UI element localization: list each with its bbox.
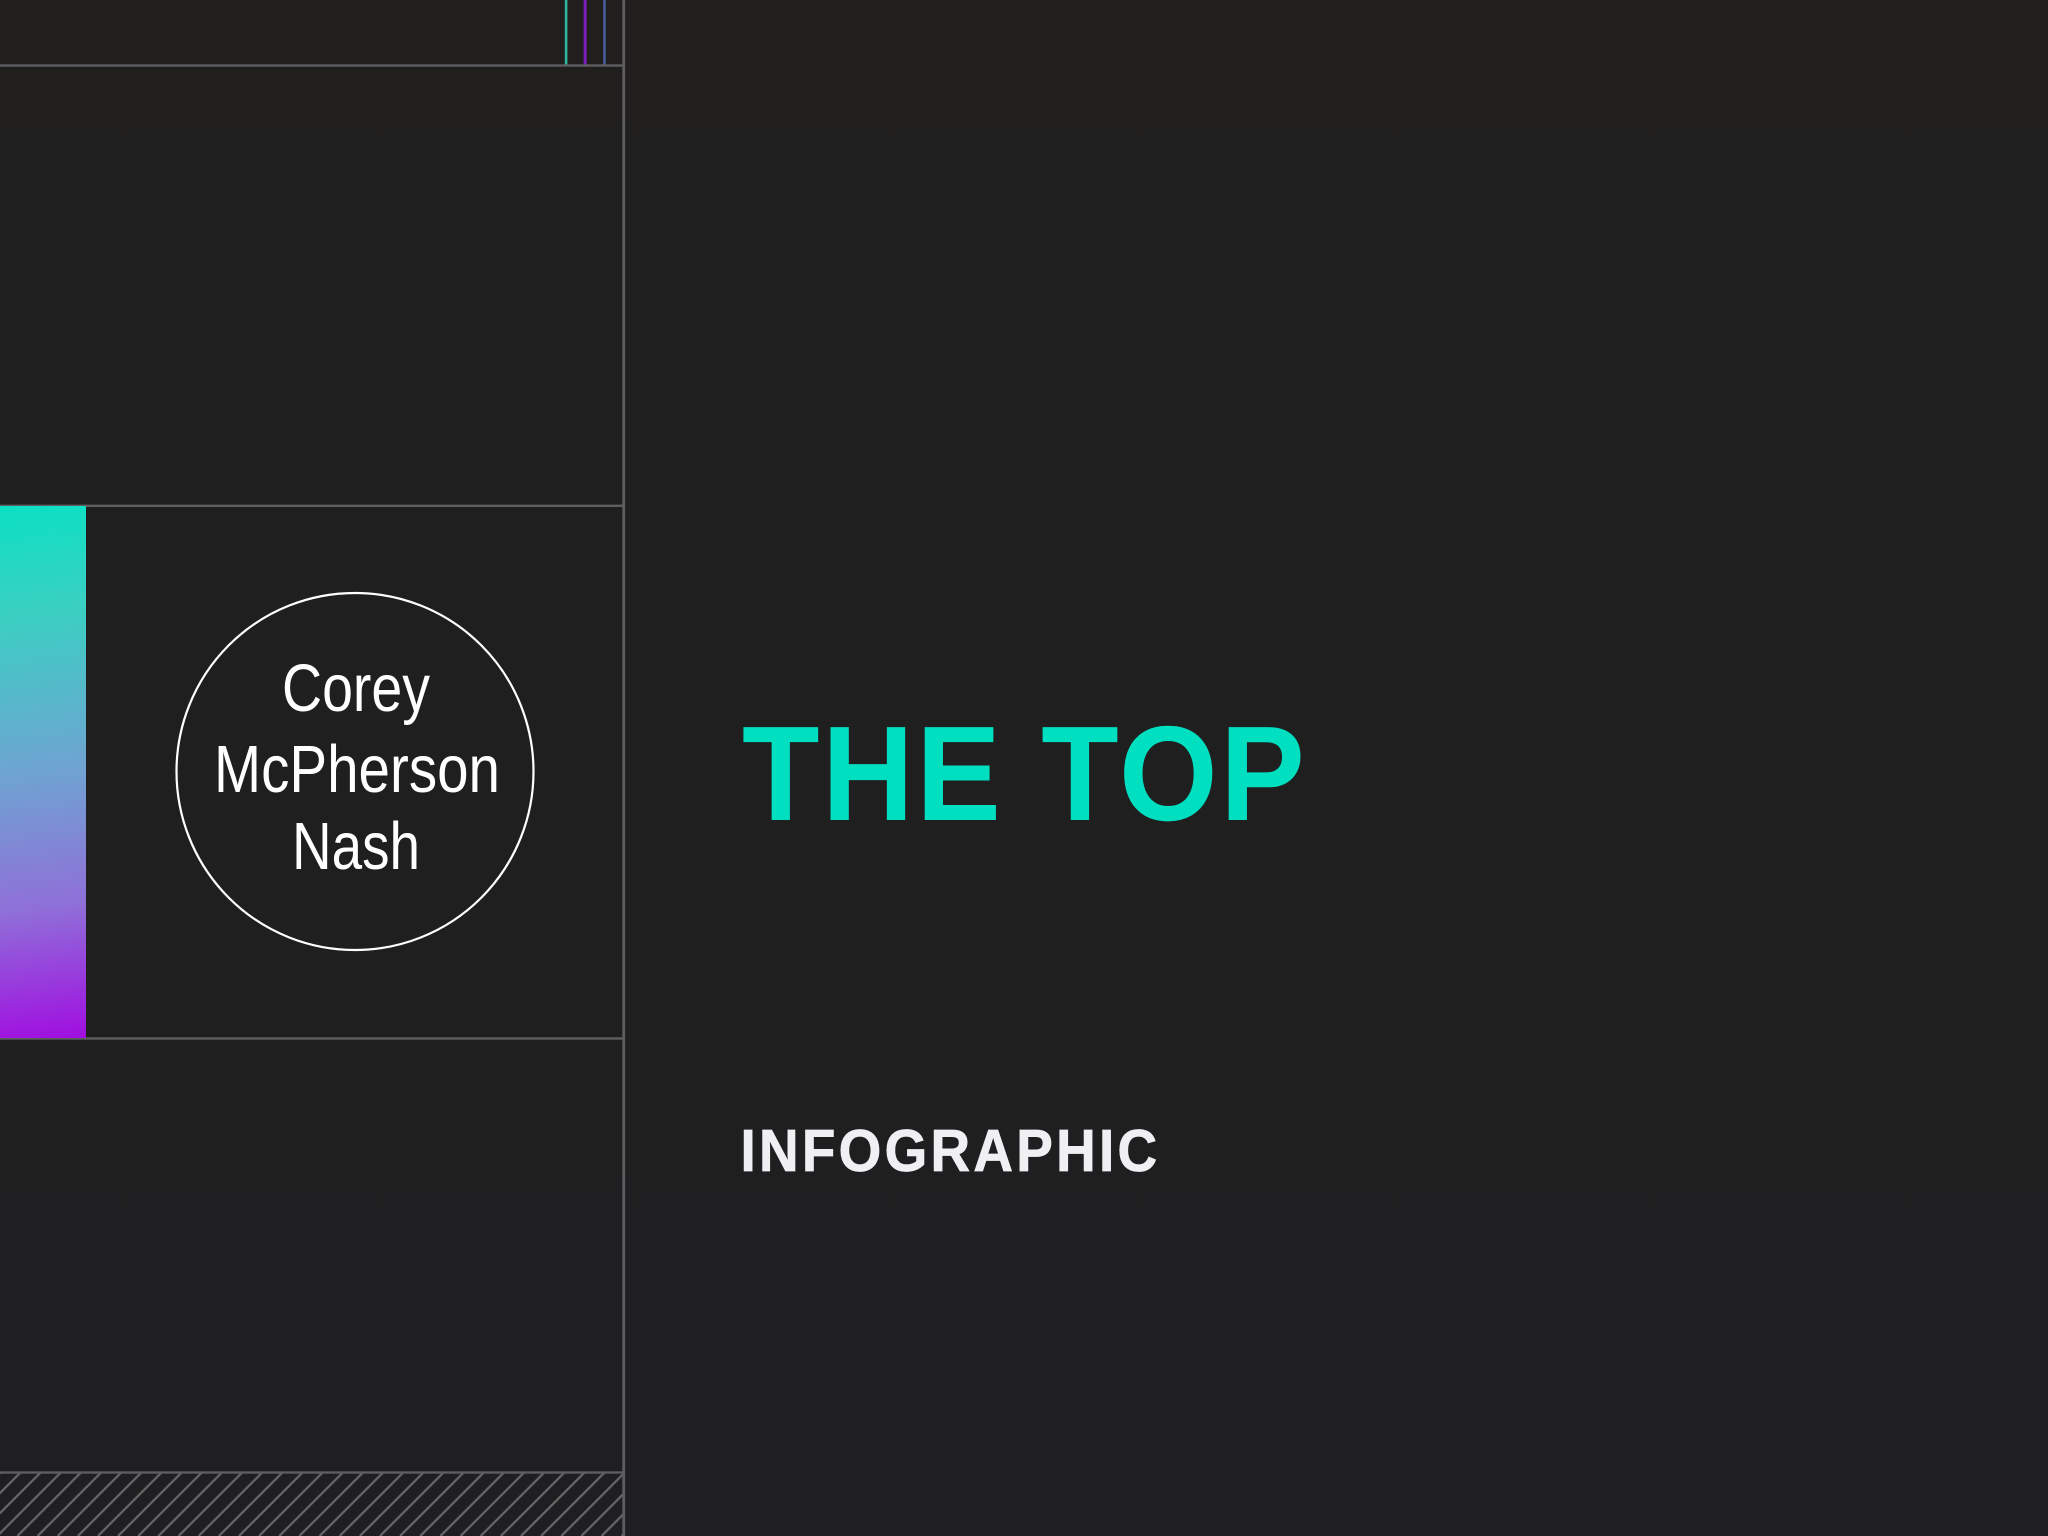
badge names: McPherson <box>214 732 500 807</box>
name badge <box>176 593 534 950</box>
badge names <box>214 651 500 884</box>
gradient bar <box>0 506 86 1038</box>
accent lines: top strip <box>565 0 606 65</box>
infographic canvas <box>0 0 1300 1536</box>
panel grid lines <box>0 0 625 1536</box>
badge circle <box>176 593 534 950</box>
badge names: Nash <box>292 809 420 884</box>
subtitle: INFOGRAPHIC <box>740 1118 1160 1184</box>
hatched footer band <box>0 1474 622 1536</box>
title: THE TOP <box>742 697 1307 849</box>
badge names: Corey <box>282 651 430 726</box>
